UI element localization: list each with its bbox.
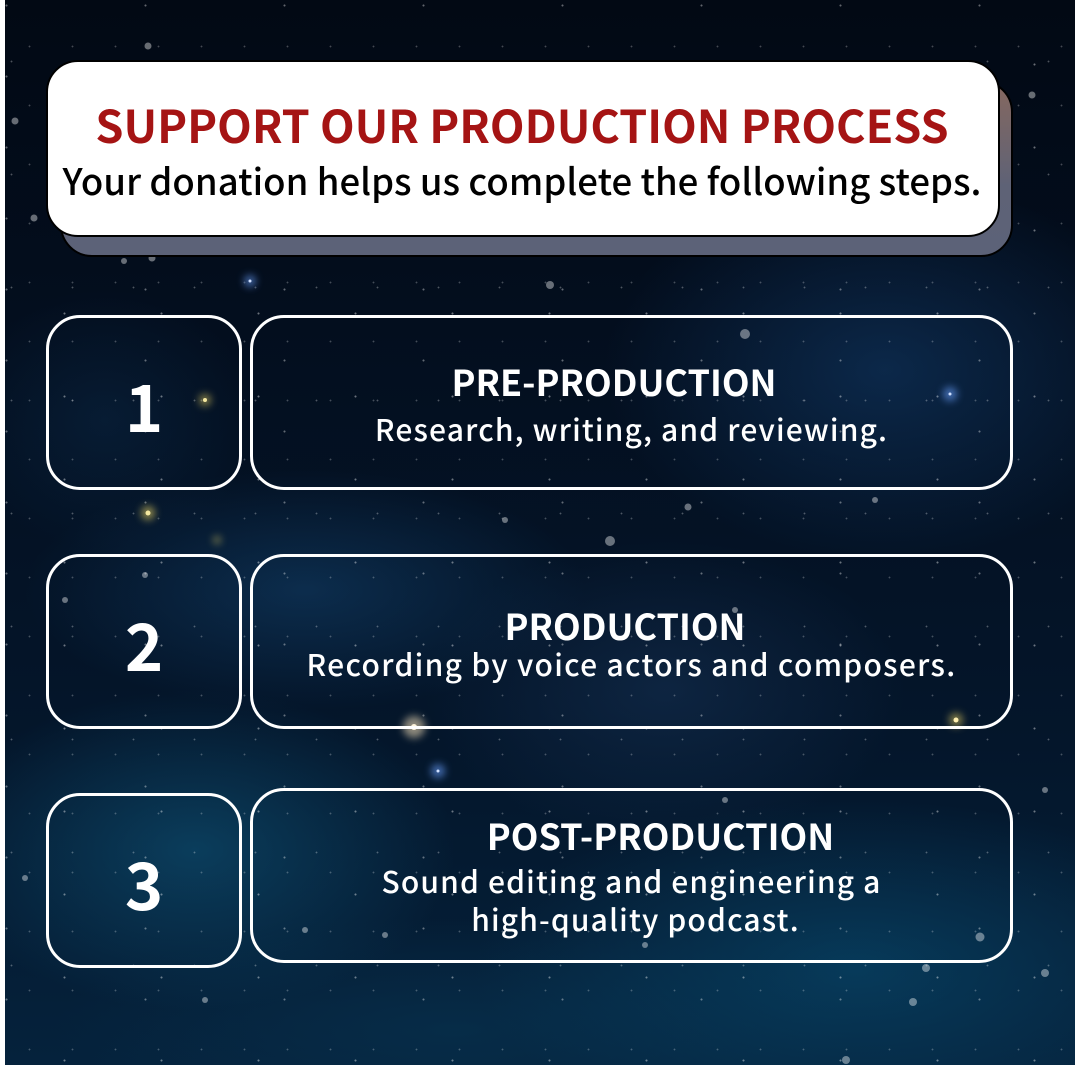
step 2 text: Recording by voice actors and composers. xyxy=(307,641,956,685)
step 3 panel xyxy=(250,788,1013,963)
step 2 panel xyxy=(250,554,1013,729)
step 1 heading: PRE-PRODUCTION xyxy=(451,355,777,407)
subtitle: Your donation helps us complete the following steps. xyxy=(63,153,981,206)
step 3 number: 3 xyxy=(125,835,163,929)
step 1 panel xyxy=(250,315,1013,490)
title: SUPPORT OUR PRODUCTION PROCESS xyxy=(95,91,949,156)
header card face xyxy=(46,60,1000,237)
header card xyxy=(46,60,1013,257)
step 3 text: Sound editing and engineering a xyxy=(381,858,882,902)
step 1 number: 1 xyxy=(125,357,163,451)
step 2 number box xyxy=(46,554,242,729)
step 3 heading: POST-PRODUCTION xyxy=(487,809,834,861)
step 3 number box xyxy=(46,793,242,968)
step 3 text: high-quality podcast. xyxy=(471,896,800,940)
step 3 text xyxy=(381,858,882,940)
step 1 number box xyxy=(46,315,242,490)
step 1 text: Research, writing, and reviewing. xyxy=(375,406,888,450)
step 2 heading: PRODUCTION xyxy=(504,599,746,651)
header card shadow xyxy=(60,80,1013,257)
step 2 number: 2 xyxy=(125,596,163,690)
